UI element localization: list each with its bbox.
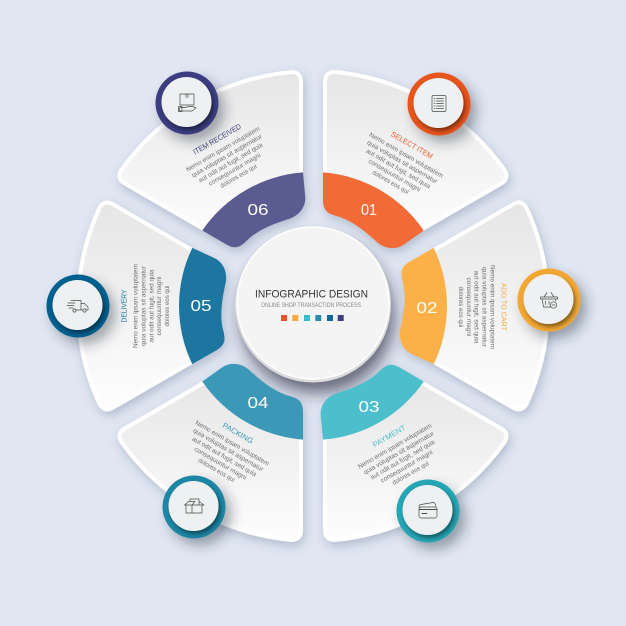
icon: basket	[518, 268, 580, 332]
text block 02: ADD TO CART	[499, 283, 508, 331]
panel: step 03 payment	[266, 344, 511, 591]
sector 02	[368, 198, 612, 445]
text block 01: Nemo enim ipsam voluptatem	[368, 132, 444, 180]
icon: truck	[46, 274, 110, 338]
text block 05: consequuntur magni	[156, 276, 163, 336]
panel: step 06 item received	[115, 21, 360, 268]
text block 02: consequuntur magni	[465, 277, 472, 337]
text block 03: aut odit aut fugit, sed quia	[370, 439, 437, 481]
text block 02: Nemo enim ipsam voluptatem	[488, 265, 495, 349]
text block 06: dolores eos qui	[219, 163, 258, 190]
number 01: 01	[361, 202, 377, 219]
text block 05: Nemo enim ipsam voluptatem	[133, 264, 140, 348]
text block 03: PAYMENT	[371, 423, 408, 449]
subtitle: ONLINE SHOP TRANSACTION PROCESS	[261, 302, 361, 309]
text block 03: dolores eos qui	[391, 460, 430, 487]
text block 01: consequuntur magni	[367, 158, 421, 194]
text block 04: Nemo enim ipsam voluptatem	[194, 420, 270, 468]
number 05: 05	[190, 298, 212, 315]
sector 01	[323, 72, 507, 248]
panel: step 01 select item	[323, 72, 507, 248]
sector 06	[115, 21, 360, 268]
text block 06: quia voluptas sit aspernatur	[191, 133, 264, 179]
number 06: 06	[248, 202, 269, 219]
text block 06: consequuntur magni	[208, 152, 262, 188]
text block 05: quia voluptas sit aspernatur	[140, 265, 148, 346]
number 04: 04	[248, 395, 269, 412]
text block 05: dolores eos qui	[164, 286, 171, 326]
text block 03: consequuntur magni	[380, 449, 434, 485]
icon: box on hand	[156, 72, 218, 134]
text block 04: aut odit aut fugit, sed quia	[191, 436, 258, 479]
text block 01: quia voluptas sit aspernatur	[366, 139, 439, 186]
text block 02: quia voluptas sit aspernatur	[480, 267, 488, 348]
text block 06	[178, 114, 277, 201]
text block 05: DELIVERY	[120, 290, 129, 322]
text block 01	[352, 120, 451, 207]
color legend squares	[281, 315, 344, 321]
text block 05	[120, 264, 171, 348]
text block 02: dolores eos qui	[457, 286, 464, 328]
text block 01: dolores eos qui	[371, 169, 410, 196]
panel: step 05 delivery	[14, 167, 258, 414]
text block 04: consequuntur magni	[193, 446, 247, 482]
number 02: 02	[416, 300, 438, 317]
text block 01: aut odit aut fugit, sed quia	[365, 148, 432, 191]
text block 02: aut odit aut fugit, sed quia	[473, 270, 480, 344]
text block 04	[178, 408, 277, 495]
text block 04: dolores eos qui	[197, 457, 236, 484]
text block 06: Nemo enim ipsam voluptatem	[185, 126, 261, 174]
text block 06: aut odit aut fugit, sed quia	[198, 142, 265, 184]
center circle shadow	[236, 227, 390, 381]
center circle	[235, 226, 391, 382]
text block 03: quia voluptas sit aspernatur	[363, 430, 436, 476]
text block 06: ITEM RECEIVED	[191, 122, 243, 157]
panel: step 02 add to cart	[368, 198, 612, 445]
sector 03	[266, 344, 511, 591]
icon: box	[162, 476, 226, 538]
main title: INFOGRAPHIC DESIGN	[255, 288, 368, 300]
icon: credit cards	[396, 480, 460, 542]
icon: list	[408, 72, 470, 136]
text block 03: Nemo enim ipsam voluptatem	[357, 423, 433, 471]
text block 04: quia voluptas sit aspernatur	[192, 427, 265, 474]
panel: step 04 packing	[119, 364, 303, 540]
text block 02	[457, 265, 508, 349]
text block 03	[350, 411, 449, 498]
text block 05: aut odit aut fugit, sed quia	[148, 269, 155, 342]
sector 04	[119, 364, 303, 540]
sector 05	[14, 167, 258, 414]
text block 01: SELECT ITEM	[389, 130, 435, 161]
text block 04: PACKING	[221, 421, 255, 446]
number 03: 03	[358, 399, 380, 416]
